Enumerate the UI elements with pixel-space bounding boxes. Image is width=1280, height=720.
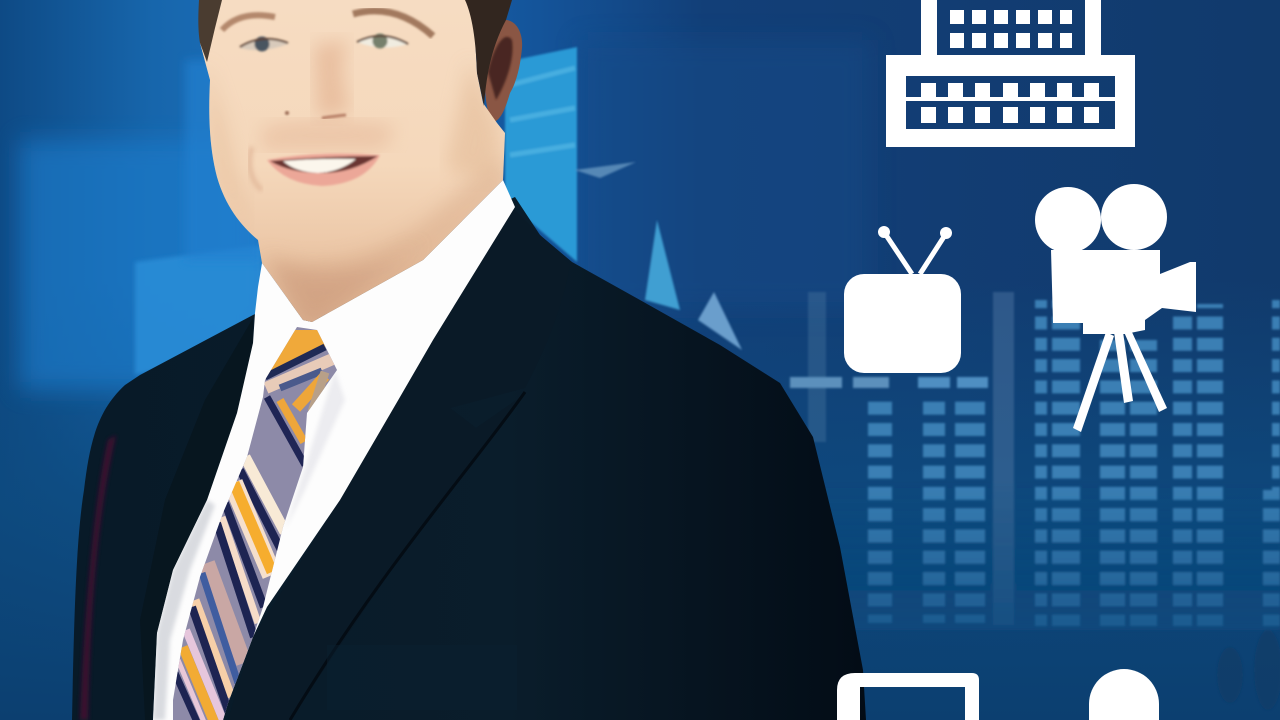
- icon: laptop outline: [837, 673, 979, 720]
- mouth: [267, 153, 380, 186]
- eyebrows: [222, 11, 433, 36]
- suit jacket: [72, 197, 866, 720]
- icon: microphone: [1089, 669, 1159, 720]
- icon: film camera: [1035, 184, 1196, 432]
- ear: [485, 20, 522, 122]
- hair: [198, 0, 512, 106]
- icon: television: [844, 226, 961, 373]
- eyes: [240, 34, 408, 52]
- person: [72, 0, 866, 720]
- nose shadow: [314, 40, 350, 118]
- nose: [285, 111, 346, 118]
- jaw shadow: [274, 158, 504, 292]
- tie: [173, 327, 337, 720]
- background city skyline: [780, 292, 1280, 710]
- background tower: [505, 47, 742, 350]
- cheek shading: [250, 147, 262, 190]
- icon: office building: [886, 0, 1135, 147]
- shirt: [150, 175, 520, 720]
- face and neck: [190, 0, 520, 330]
